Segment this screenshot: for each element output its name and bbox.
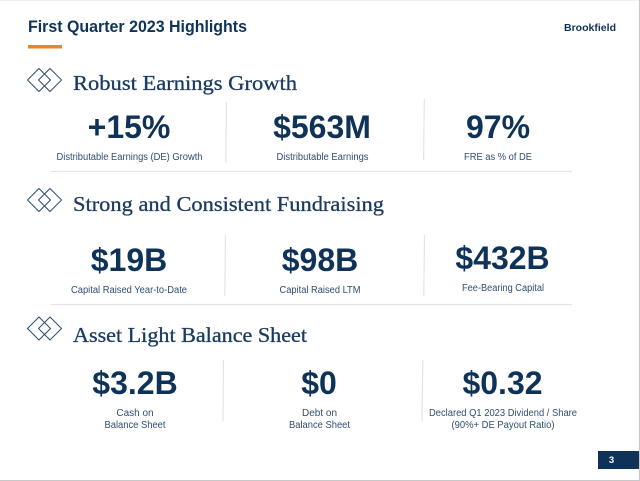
section: Asset Light Balance Sheet xyxy=(28,317,577,431)
stat: +15%: Distributable Earnings (DE) Growth xyxy=(56,152,202,163)
icon: overlapping diamonds xyxy=(28,188,62,212)
stat: $563M: $563M xyxy=(273,109,371,145)
stat: $98B xyxy=(280,242,360,296)
stat: $3.2B: Cash on xyxy=(116,408,154,419)
page number badge: 3 xyxy=(609,455,614,466)
stat: $0: $0 xyxy=(301,365,337,401)
stat: $19B: $19B xyxy=(91,242,167,278)
stat: $98B: Capital Raised LTM xyxy=(280,285,360,296)
logo: Brookfield: Brookfield xyxy=(564,22,616,34)
stat: $0.32: $0.32 xyxy=(462,365,543,401)
title accent bar xyxy=(28,45,62,48)
title: First Quarter 2023 Highlights xyxy=(28,18,247,36)
stat: $432B xyxy=(455,240,550,294)
heading: Asset Light Balance Sheet xyxy=(73,323,307,347)
icon: overlapping diamonds xyxy=(28,317,62,340)
heading: Robust Earnings Growth xyxy=(73,71,298,95)
stat: $0: Debt on xyxy=(302,408,337,419)
stat: $3.2B xyxy=(92,365,178,431)
stat: $3.2B: Balance Sheet xyxy=(104,420,166,431)
heading: Strong and Consistent Fundraising xyxy=(73,192,385,216)
stat: $563M: Distributable Earnings xyxy=(276,152,368,163)
page number badge xyxy=(598,451,639,469)
stat: $0: Balance Sheet xyxy=(289,420,350,431)
stat: $563M xyxy=(273,109,371,163)
stat: $0.32: Declared Q1 2023 Dividend / Share xyxy=(429,408,577,419)
stat: $98B: $98B xyxy=(282,242,358,278)
stat: $19B xyxy=(71,242,187,296)
section: Robust Earnings Growth xyxy=(28,68,532,163)
stat: $0.32: (90%+ DE Payout Ratio) xyxy=(452,420,554,431)
stat: 97% xyxy=(464,109,532,163)
stat: $3.2B: $3.2B xyxy=(92,365,178,401)
section: Strong and Consistent Fundraising xyxy=(28,188,550,296)
stat: $432B: Fee-Bearing Capital xyxy=(462,283,544,294)
stat: $19B: Capital Raised Year-to-Date xyxy=(71,285,187,296)
stat: $0 xyxy=(289,365,350,431)
stat: $0.32 xyxy=(429,365,577,431)
stat: +15% xyxy=(56,109,202,163)
icon: overlapping diamonds xyxy=(28,68,62,92)
stat: 97%: 97% xyxy=(466,109,530,145)
stat: +15%: +15% xyxy=(88,109,170,145)
stat: 97%: FRE as % of DE xyxy=(464,152,532,163)
stat: $432B: $432B xyxy=(455,240,550,276)
